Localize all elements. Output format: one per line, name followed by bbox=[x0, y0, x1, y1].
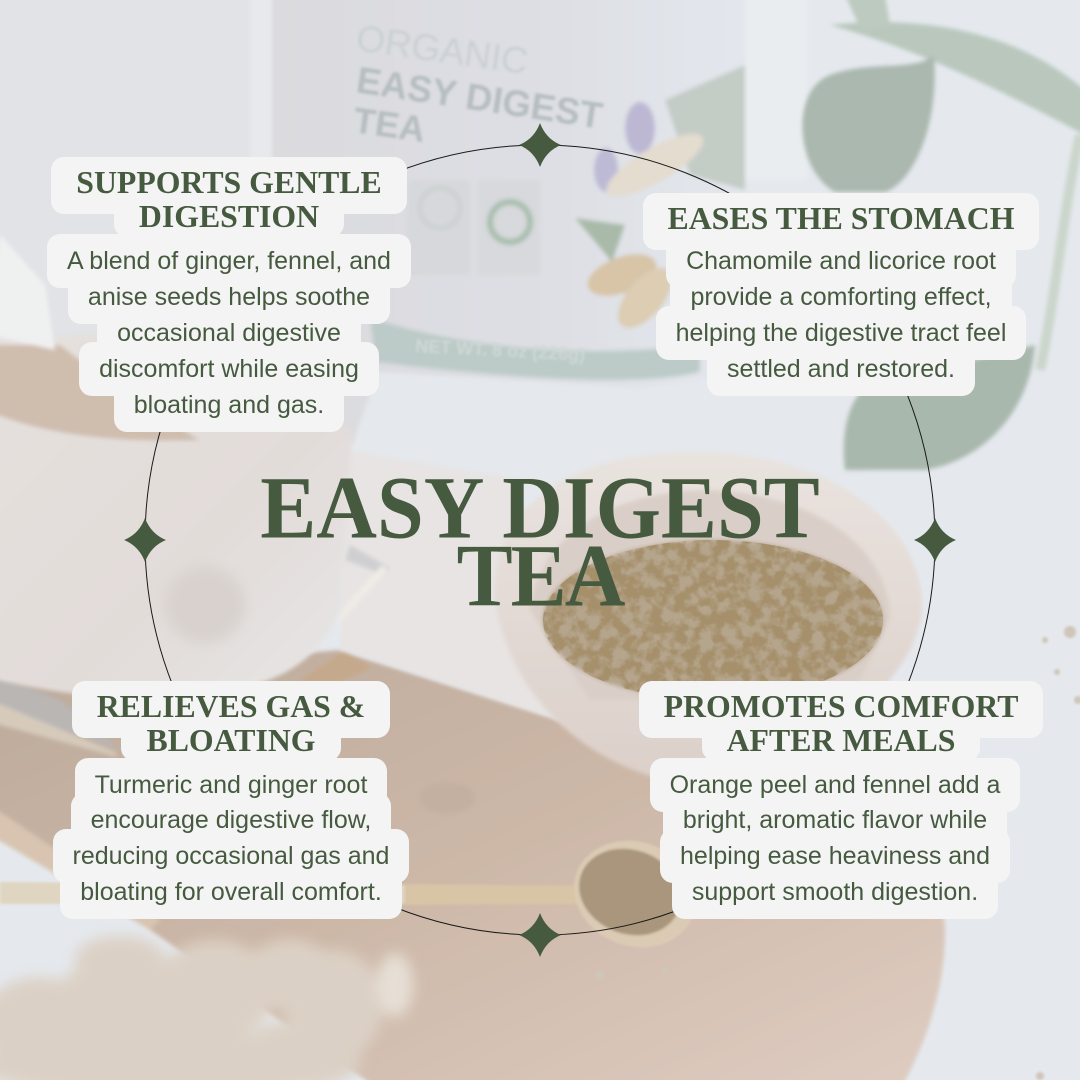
heading: relieves gas and bloating: RELIEVES GAS & bbox=[97, 689, 365, 724]
text: supports gentle digestion: anise seeds helps soothe bbox=[88, 283, 370, 311]
gold spoon bbox=[0, 824, 711, 964]
heading: supports gentle digestion: DIGESTION bbox=[139, 199, 319, 234]
title bbox=[260, 459, 820, 626]
text: promotes comfort after meals: helping ease heaviness and bbox=[680, 842, 990, 870]
heading: supports gentle digestion bbox=[51, 157, 407, 234]
heading: promotes comfort after meals bbox=[639, 681, 1043, 758]
bag label text: ORGANIC bbox=[354, 17, 531, 82]
text: promotes comfort after meals: Orange peel and fennel add a bbox=[670, 771, 1000, 799]
text: eases the stomach: settled and restored. bbox=[727, 355, 955, 383]
text: promotes comfort after meals bbox=[650, 758, 1020, 919]
flecks of tea on the table bbox=[595, 626, 1080, 1080]
icon: star top bbox=[519, 123, 561, 167]
bag label text: NET WT. 8 oz (226g) bbox=[415, 336, 586, 365]
text: relieves gas and bloating: reducing occasional gas and bbox=[73, 842, 389, 870]
heading: eases the stomach: EASES THE STOMACH bbox=[668, 201, 1014, 236]
icon: star bottom bbox=[519, 913, 561, 957]
text: eases the stomach: provide a comforting effect, bbox=[690, 283, 992, 311]
ginger root bbox=[0, 936, 413, 1080]
product bag bbox=[250, 0, 807, 445]
bag label text bbox=[351, 17, 606, 365]
mug of tea bbox=[0, 235, 352, 698]
title: TEA bbox=[457, 527, 623, 626]
text: relieves gas and bloating: Turmeric and ginger root bbox=[95, 771, 367, 799]
text: promotes comfort after meals: bright, aromatic flavor while bbox=[683, 806, 987, 834]
text: relieves gas and bloating: encourage digestive flow, bbox=[91, 806, 371, 834]
text: supports gentle digestion: A blend of ginger, fennel, and bbox=[67, 247, 391, 275]
text: relieves gas and bloating bbox=[53, 758, 409, 919]
text: supports gentle digestion: bloating and gas. bbox=[134, 391, 324, 419]
icon: star left bbox=[124, 518, 166, 562]
heading: supports gentle digestion: SUPPORTS GENTLE bbox=[76, 165, 382, 200]
text: supports gentle digestion bbox=[47, 234, 411, 432]
leaves bbox=[802, 0, 1080, 470]
wooden board bbox=[0, 650, 945, 1080]
bag label text: EASY DIGEST bbox=[354, 59, 606, 137]
text: relieves gas and bloating: bloating for overall comfort. bbox=[80, 878, 382, 906]
text: eases the stomach: Chamomile and licorice root bbox=[686, 247, 996, 275]
text: promotes comfort after meals: support smooth digestion. bbox=[692, 878, 978, 906]
bowl of loose tea bbox=[495, 452, 922, 785]
heading: promotes comfort after meals: AFTER MEALS bbox=[727, 723, 955, 758]
heading: relieves gas and bloating: BLOATING bbox=[146, 723, 316, 758]
text: eases the stomach bbox=[656, 247, 1026, 396]
bag label text: TEA bbox=[351, 99, 428, 150]
heading: relieves gas and bloating bbox=[72, 681, 390, 758]
text: supports gentle digestion: discomfort while easing bbox=[99, 355, 359, 383]
heading: promotes comfort after meals: PROMOTES COMFORT bbox=[664, 689, 1018, 724]
text: supports gentle digestion: occasional digestive bbox=[117, 319, 341, 347]
text: eases the stomach: helping the digestive tract feel bbox=[676, 319, 1006, 347]
icon: star right bbox=[914, 518, 956, 562]
title: EASY DIGEST bbox=[260, 459, 820, 558]
white tray bbox=[335, 450, 560, 720]
